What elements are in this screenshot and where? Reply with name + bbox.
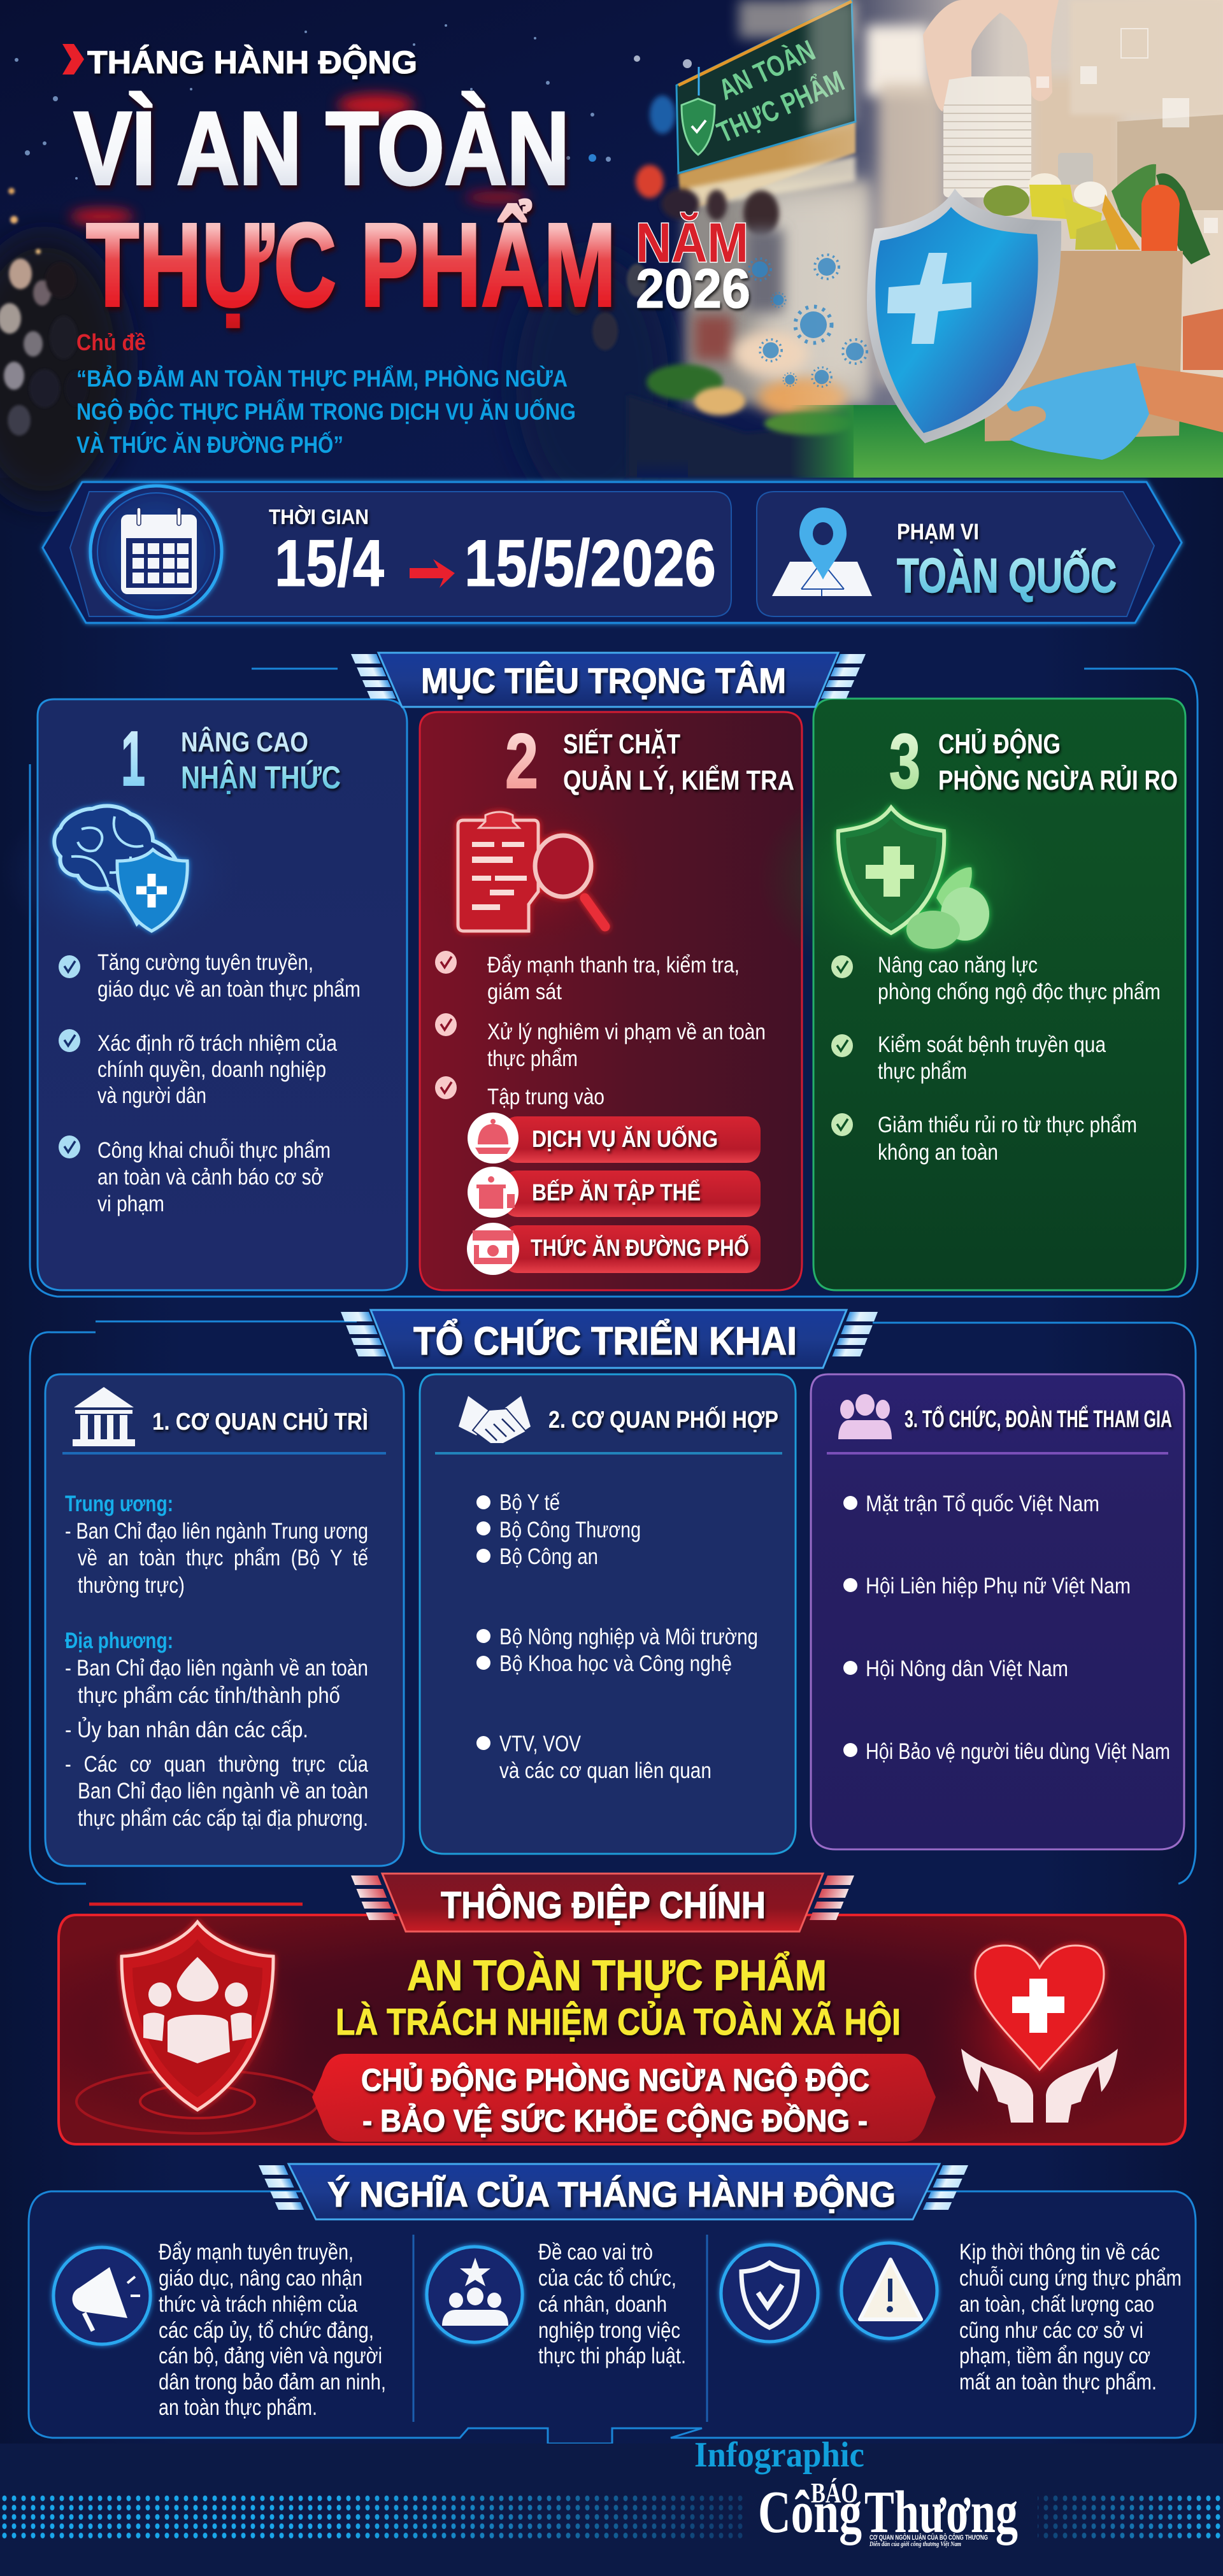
body: trung uong: thường trực)	[78, 1573, 185, 1598]
frame	[29, 2191, 1196, 2444]
logo: bao cong thuong: Thương	[864, 2479, 1018, 2545]
logo: bao cong thuong: CƠ QUAN NGÔN LUẬN CỦA BỘ CÔNG THƯƠNG	[869, 2533, 988, 2542]
list: Bộ Công Thương	[499, 1518, 641, 1542]
body: dia phuong: Địa phương:	[65, 1628, 173, 1653]
scope value: TOÀN QUỐC	[897, 549, 1117, 603]
body: trung uong: Trung ương:	[65, 1491, 173, 1516]
list: giáo dục về an toàn thực phẩm	[97, 977, 361, 1002]
hero red flares	[70, 94, 529, 224]
panel: y nghia	[29, 2164, 1196, 2444]
text: của các tổ chức,	[538, 2266, 676, 2291]
theme text: “BẢO ĐẢM AN TOÀN THỰC PHẨM, PHÒNG NGỪA	[76, 365, 568, 392]
text: thực thi pháp luật.	[538, 2344, 686, 2368]
logo: bao cong thuong: Công	[758, 2479, 862, 2545]
panel: thong diep chinh	[59, 1874, 1185, 2144]
title: 1. CƠ QUAN CHỦ TRÌ	[152, 1407, 368, 1435]
heading: muc tieu trong tam	[351, 653, 866, 707]
heading: to chuc trien khai	[341, 1310, 878, 1368]
theme text: VÀ THỨC ĂN ĐƯỜNG PHỐ”	[76, 431, 343, 458]
list: Hội Liên hiệp Phụ nữ Việt Nam	[866, 1574, 1131, 1598]
start date: 15/4	[275, 527, 384, 601]
list: Xác định rõ trách nhiệm của	[97, 1031, 337, 1056]
list: thực phẩm	[487, 1046, 578, 1071]
body: dia phuong: Ban Chỉ đạo liên ngành về an toàn	[78, 1779, 368, 1804]
arrow	[410, 559, 455, 588]
body: dia phuong: - Ban Chỉ đạo liên ngành về an toàn	[65, 1656, 368, 1681]
text: cán bộ, đảng viên và người	[159, 2344, 382, 2368]
title: nam: NĂM	[636, 212, 748, 274]
list: giám sát	[487, 979, 562, 1004]
text: các cấp ủy, tổ chức đảng,	[159, 2318, 374, 2343]
text: dân trong bảo đảm an ninh,	[159, 2370, 386, 2395]
list: và người dân	[97, 1083, 206, 1108]
theme label: Chủ đề	[76, 329, 146, 355]
heading: CHỦ ĐỘNG	[938, 727, 1061, 760]
end date: 15/5/2026	[464, 527, 716, 601]
body: dia phuong: thực phẩm các tỉnh/thành phố	[78, 1683, 340, 1708]
number 1: 1	[121, 715, 145, 802]
text: mất an toàn thực phẩm.	[959, 2370, 1157, 2395]
list: VTV, VOV	[499, 1732, 582, 1756]
body: dia phuong: - Các cơ quan thường trực của	[65, 1752, 368, 1777]
infographic label: Infographic	[694, 2435, 864, 2475]
red callout: - BẢO VỆ SỨC KHỎE CỘNG ĐỒNG -	[362, 2103, 868, 2138]
red callout	[312, 2054, 936, 2142]
card 3: chu dong phong ngua	[758, 699, 1185, 1290]
text: Đẩy mạnh tuyên truyền,	[159, 2240, 354, 2265]
item 2	[427, 2240, 686, 2368]
icon: handshake	[459, 1396, 531, 1444]
list	[476, 1490, 758, 1783]
icon: shield check	[721, 2245, 818, 2342]
message panel	[59, 1904, 1185, 2144]
panel: to chuc trien khai	[30, 1310, 1196, 1884]
pill: thuc an duong pho: THỨC ĂN ĐƯỜNG PHỐ	[531, 1234, 749, 1261]
list: Bộ Nông nghiệp và Môi trường	[499, 1625, 758, 1649]
item 3	[721, 2240, 1182, 2395]
hero sign: an toan thuc pham	[676, 0, 857, 173]
body: dia phuong	[65, 1628, 368, 1831]
title: thuc pham: THỰC PHẨM	[86, 199, 616, 331]
icon: map pin	[772, 508, 872, 596]
time and scope bar	[43, 482, 1182, 623]
scope label: PHẠM VI	[897, 520, 979, 544]
hero arm	[1136, 309, 1223, 432]
pill: dich vu an uong	[468, 1113, 761, 1163]
heading: thong diep chinh: THÔNG ĐIỆP CHÍNH	[441, 1884, 766, 1926]
number 3: 3	[889, 718, 920, 804]
number 2: 2	[505, 718, 538, 804]
hero beige background	[739, 0, 1223, 408]
list: và các cơ quan liên quan	[499, 1758, 712, 1783]
text: phạm, tiềm ẩn nguy cơ	[959, 2344, 1150, 2368]
icon: heart in hands	[961, 1946, 1118, 2123]
list: chính quyền, doanh nghiệp	[97, 1057, 326, 1082]
heading: NÂNG CAO	[181, 726, 308, 758]
footer	[0, 2435, 1223, 2576]
icon: clipboard and magnifier	[458, 812, 605, 931]
panel: scope	[757, 492, 1154, 616]
list: Bộ Công an	[499, 1544, 598, 1569]
body: trung uong: - Ban Chỉ đạo liên ngành Trung ương	[65, 1519, 368, 1544]
hero banner	[0, 0, 1223, 509]
slogan: LÀ TRÁCH NHIỆM CỦA TOÀN XÃ HỘI	[336, 2002, 901, 2043]
title: 2026: 2026	[636, 258, 750, 320]
hero sign: an toan thuc pham: AN TOÀN	[713, 33, 820, 106]
card 2: siet chat quan ly	[408, 712, 802, 1290]
list: Mặt trận Tổ quốc Việt Nam	[866, 1491, 1099, 1516]
card 1: nang cao nhan thuc: NHẬN THỨC	[181, 760, 341, 795]
hero cardboard box behind	[1117, 115, 1223, 210]
text: chuỗi cung ứng thực phẩm	[959, 2266, 1182, 2291]
heading: thong diep chinh	[351, 1874, 854, 1932]
list: không an toàn	[878, 1140, 998, 1165]
list: Nâng cao năng lực	[878, 953, 1038, 978]
hero blue shield	[867, 189, 1061, 443]
list: Hội Nông dân Việt Nam	[866, 1656, 1068, 1681]
list: Kiểm soát bệnh truyền qua	[878, 1032, 1106, 1057]
pill: thuc an duong pho	[467, 1223, 761, 1275]
heading: muc tieu trong tam: MỤC TIÊU TRỌNG TÂM	[421, 660, 786, 701]
list: vi phạm	[97, 1192, 164, 1216]
hero paper box	[985, 251, 1183, 441]
hero viruses	[749, 255, 867, 387]
text: giáo dục, nâng cao nhận	[159, 2266, 362, 2291]
title: 2. CƠ QUAN PHỐI HỢP	[548, 1405, 778, 1434]
pill: bep an tap the: BẾP ĂN TẬP THỂ	[532, 1179, 701, 1206]
icon: star and people	[427, 2247, 522, 2342]
heading: SIẾT CHẶT	[563, 728, 680, 760]
list	[435, 951, 766, 1109]
list: Bộ Khoa học và Công nghệ	[499, 1651, 732, 1676]
hero photo: street stall	[627, 121, 873, 478]
panel: time	[70, 486, 731, 617]
body: trung uong: về an toàn thực phẩm (Bộ Y tế	[78, 1546, 368, 1570]
text: thức và trách nhiệm của	[159, 2292, 357, 2317]
text: Kịp thời thông tin về các	[959, 2240, 1160, 2265]
text: an toàn, chất lượng cao	[959, 2292, 1154, 2317]
time label: THỜI GIAN	[269, 505, 369, 529]
hero green ground	[790, 405, 1223, 478]
text: cá nhân, doanh	[538, 2292, 667, 2317]
list: Công khai chuỗi thực phẩm	[97, 1138, 331, 1163]
shield cross	[887, 253, 971, 344]
text	[538, 2240, 686, 2368]
hero vegetables	[983, 164, 1210, 264]
text: an toàn thực phẩm.	[159, 2395, 317, 2420]
icon: brain and shield	[54, 806, 187, 931]
text: Đề cao vai trò	[538, 2240, 653, 2265]
frame	[30, 1321, 1196, 1884]
hero tech squares	[1036, 29, 1218, 233]
hero hand and glass	[923, 0, 1093, 197]
footer dots right	[1038, 2494, 1223, 2540]
list: Bộ Y tế	[499, 1490, 560, 1515]
kicker: thang hanh dong: THÁNG HÀNH ĐỘNG	[87, 44, 417, 80]
list: Tăng cường tuyên truyền,	[97, 950, 313, 975]
text: cũng như các cơ sở vi	[959, 2318, 1143, 2343]
text	[959, 2240, 1182, 2395]
icon: shield with people	[76, 1922, 318, 2133]
slogan	[336, 1951, 901, 2043]
list: Xử lý nghiêm vi phạm về an toàn	[487, 1020, 766, 1044]
list: Giảm thiểu rủi ro từ thực phẩm	[878, 1113, 1137, 1137]
card 1: nang cao nhan thuc	[0, 699, 407, 1290]
list: thực phẩm	[878, 1059, 967, 1084]
heading: to chuc trien khai: TỔ CHỨC TRIỂN KHAI	[413, 1319, 797, 1363]
pill: dich vu an uong: DỊCH VỤ ĂN UỐNG	[532, 1125, 718, 1152]
logo: bao cong thuong	[758, 2477, 1018, 2548]
card 2: co quan phoi hop	[420, 1374, 796, 1854]
theme text	[76, 365, 576, 458]
slogan: AN TOÀN THỰC PHẨM	[407, 1951, 827, 2000]
list: phòng chống ngộ độc thực phẩm	[878, 979, 1161, 1004]
icon: people	[838, 1394, 892, 1439]
icon: warning	[841, 2243, 937, 2338]
heading: y nghia	[259, 2164, 968, 2219]
card 1: co quan chu tri	[45, 1374, 404, 1866]
hero sign: an toan thuc pham: THỰC PHẨM	[712, 64, 849, 149]
list: Đẩy mạnh thanh tra, kiểm tra,	[487, 953, 740, 978]
panel: muc tieu trong tam	[0, 653, 1198, 1297]
body: trung uong	[65, 1491, 368, 1598]
icon: green shield and vegetables	[838, 808, 989, 949]
list	[831, 953, 1161, 1165]
title: vi an toan: VÌ AN TOÀN	[74, 90, 569, 206]
icon: government building	[73, 1387, 135, 1446]
body: dia phuong: - Ủy ban nhân dân các cấp.	[65, 1717, 308, 1742]
list: an toàn và cảnh báo cơ sở	[97, 1165, 324, 1190]
red callout: CHỦ ĐỘNG PHÒNG NGỪA NGỘ ĐỘC	[361, 2063, 869, 2098]
item 1	[54, 2240, 386, 2420]
card 2: siet chat quan ly: QUẢN LÝ, KIỂM TRA	[563, 764, 794, 796]
frame	[30, 669, 1198, 1297]
footer dots left	[0, 2494, 747, 2540]
body: dia phuong: thực phẩm các cấp tại địa phương.	[78, 1806, 368, 1831]
list	[59, 950, 361, 1216]
list	[843, 1491, 1170, 1764]
heading: y nghia: Ý NGHĨA CỦA THÁNG HÀNH ĐỘNG	[327, 2174, 896, 2214]
text	[159, 2240, 386, 2420]
icon: calendar	[90, 486, 222, 617]
text: nghiệp trong việc	[538, 2318, 680, 2343]
icon: megaphone	[54, 2247, 150, 2344]
list: Tập trung vào	[487, 1085, 604, 1109]
pill: bep an tap the	[468, 1167, 761, 1218]
hero glove	[1006, 363, 1149, 460]
card 3: to chuc doan the	[811, 1374, 1184, 1849]
theme text: NGỘ ĐỘC THỰC PHẨM TRONG DỊCH VỤ ĂN UỐNG	[76, 398, 576, 425]
hero photo: night crowd	[0, 24, 692, 509]
logo: bao cong thuong: Diễn đàn của giới công thương Việt Nam	[869, 2540, 961, 2548]
logo: bao cong thuong: BÁO	[811, 2477, 858, 2508]
